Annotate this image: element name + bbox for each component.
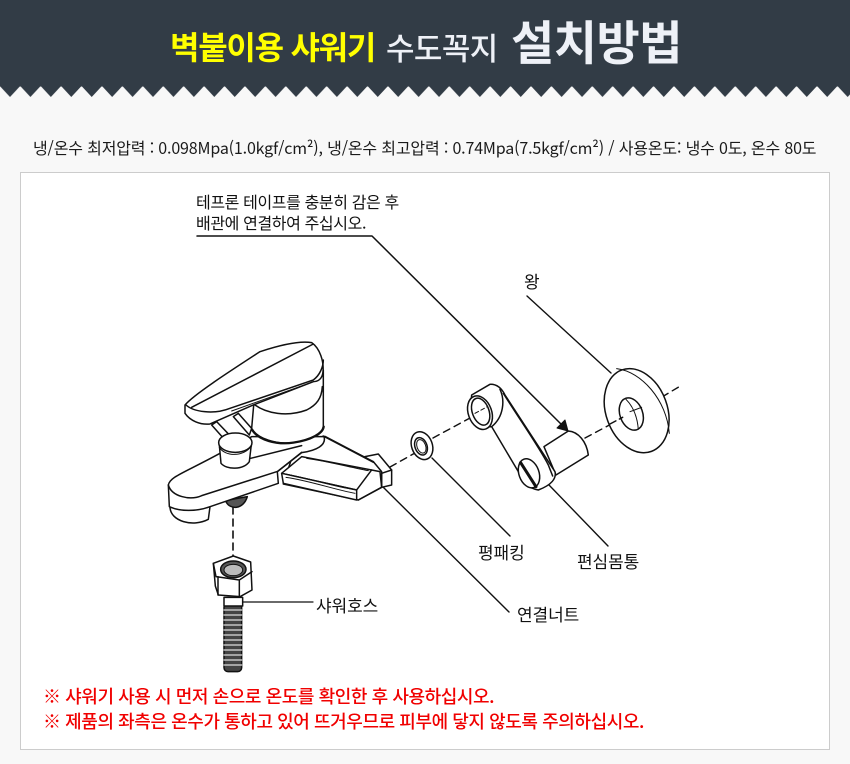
handle [185, 342, 323, 424]
icon: eccentric connector [463, 384, 588, 491]
leader line: teflon tape [197, 236, 566, 429]
warning notes [43, 683, 644, 734]
icon: faucet [168, 342, 392, 523]
faucet spout [170, 507, 210, 523]
knob [219, 442, 252, 468]
callout: teflon tape: 배관에 연결하여 주십시오. [196, 210, 366, 234]
specification line: 냉/온수 최저압력 : 0.098Mpa(1.0kgf/cm²), 냉/온수 최고압력 : 0.74Mpa(7.5kgf/cm²) / 사용온도: 냉수 0도, 온수 80도 [33, 135, 816, 159]
label: shower hose: 샤워호스 [316, 592, 378, 617]
leader line: shower hose [243, 601, 313, 603]
vertical dashed line [232, 507, 234, 556]
header banner [0, 0, 850, 97]
rear body [283, 436, 382, 500]
callout: teflon tape: 테프론 테이프를 충분히 감은 후 [196, 189, 399, 213]
thread under deck [226, 497, 247, 507]
leader line: connection nut [383, 487, 509, 612]
icon: flat packing ring [407, 429, 437, 463]
leader line: flat packing [432, 458, 510, 536]
label: flat packing: 평패킹 [478, 539, 525, 564]
label: connection nut: 연결너트 [517, 601, 579, 626]
leader line: eccentric body [549, 485, 608, 546]
label: eccentric body: 편심몸통 [577, 548, 639, 573]
label: washer: 왕 [524, 268, 540, 293]
cylinder [252, 370, 323, 443]
panel: installation diagram [20, 172, 830, 750]
connector cover [282, 457, 372, 490]
title: 벽붙이용 샤워기 [170, 23, 375, 69]
warning notes: ※ 샤워기 사용 시 먼저 손으로 온도를 확인한 후 사용하십시오. [43, 683, 494, 709]
callout: teflon tape [196, 189, 399, 234]
warning notes: ※ 제품의 좌측은 온수가 통하고 있어 뜨거우므로 피부에 닿지 않도록 주의하십시오. [43, 708, 644, 734]
icon: shower hose fitting [213, 556, 252, 672]
leader line: washer [527, 296, 611, 373]
title: 수도꼭지 [386, 24, 498, 69]
title: 설치방법 [511, 5, 682, 74]
arrowhead: teflon tape leader [557, 420, 568, 431]
lever arms [212, 413, 252, 440]
icon: wall washer [593, 359, 680, 462]
connector nut [365, 454, 392, 487]
faucet deck [168, 437, 324, 510]
title [170, 5, 682, 74]
axis dashed line [390, 385, 682, 467]
